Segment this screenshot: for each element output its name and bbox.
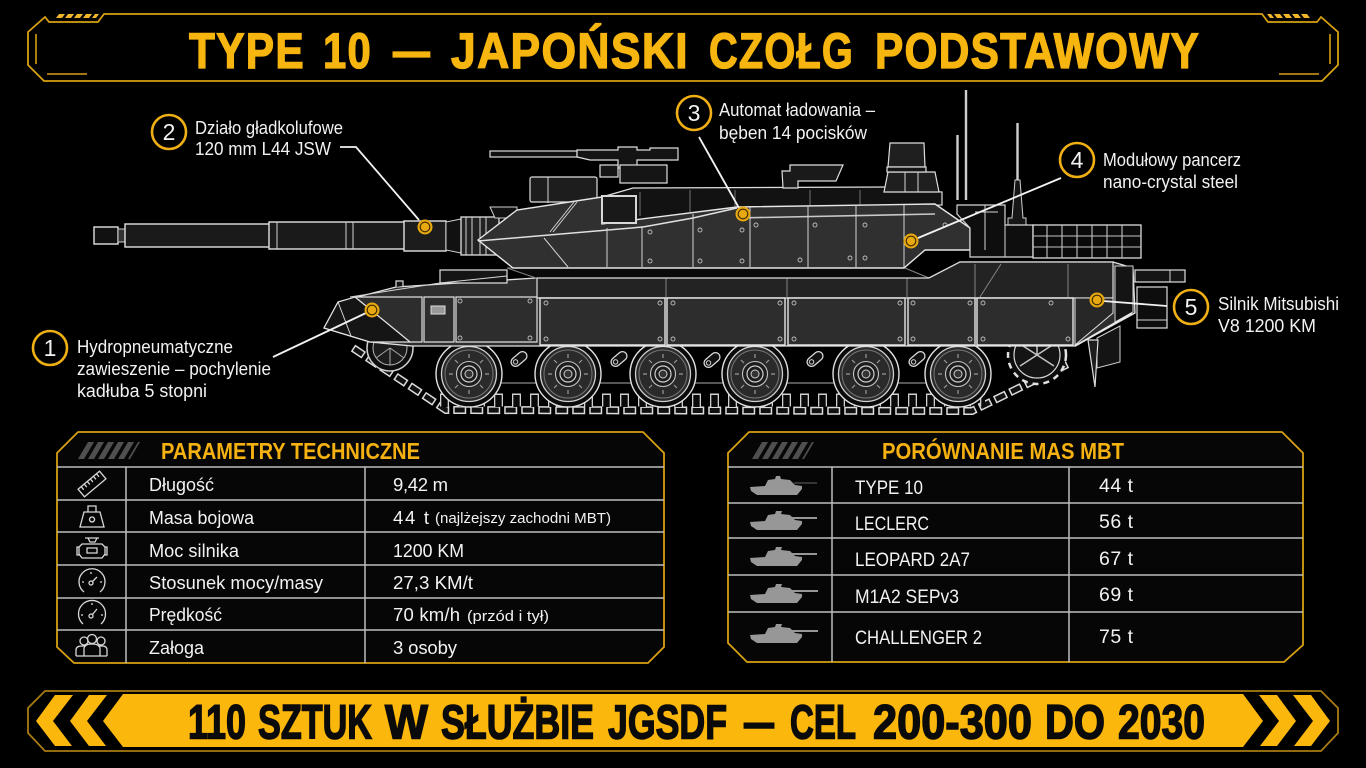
row labels: Załoga xyxy=(149,637,205,658)
callout 1 text: Hydropneumatyczne xyxy=(77,336,233,357)
callout 4 text: Modułowy pancerz xyxy=(1103,149,1241,170)
turret window xyxy=(602,196,636,223)
icon: ruler xyxy=(78,471,106,497)
panel frame xyxy=(728,432,1303,662)
callout 4 text: nano-crystal steel xyxy=(1103,171,1238,192)
banner text: CEL xyxy=(790,696,856,750)
banner text: W xyxy=(385,696,429,750)
panel: MBT mass comparison xyxy=(728,432,1303,662)
callout 2 text: Działo gładkolufowe xyxy=(195,117,343,138)
tank masses xyxy=(1099,475,1134,648)
panel heading: PARAMETRY TECHNICZNE xyxy=(161,438,420,464)
callout 1 number: 1 xyxy=(44,335,56,361)
callout 5 xyxy=(1090,290,1339,336)
side skirt panels xyxy=(540,298,1073,345)
tank masses: 56 t xyxy=(1099,511,1134,533)
callout 1 text: zawieszenie – pochylenie xyxy=(77,358,271,379)
tank silhouette: Leclerc xyxy=(750,511,817,530)
row values: 1200 KM xyxy=(393,540,464,561)
footer banner xyxy=(28,691,1338,751)
callout 2 xyxy=(152,115,432,234)
table grid xyxy=(728,467,1303,662)
row values: (najlżejszy zachodni MBT) xyxy=(435,510,611,527)
title: JAPOŃSKI xyxy=(451,23,689,79)
panel: technical parameters xyxy=(57,432,664,663)
callout 4 leader xyxy=(904,178,1061,248)
table grid xyxy=(57,467,664,663)
callout 5 number xyxy=(1174,290,1208,324)
title: TYPE xyxy=(189,23,305,79)
banner text: 2030 xyxy=(1118,696,1205,750)
tank silhouette: Leopard 2A7 xyxy=(750,547,817,566)
callout 2 number xyxy=(152,115,186,149)
chevrons right xyxy=(1259,695,1330,746)
title: 10 xyxy=(323,23,372,79)
callout 3 number xyxy=(677,96,711,130)
callout 1 leader xyxy=(273,302,380,357)
icon: gauge 2 xyxy=(78,600,106,624)
rear sprocket xyxy=(1008,326,1066,384)
row labels: Masa bojowa xyxy=(149,507,255,528)
icon: engine xyxy=(77,538,107,558)
suspension arms xyxy=(470,382,960,384)
callout 5 text: V8 1200 KM xyxy=(1218,315,1316,336)
callout 5 number: 5 xyxy=(1185,294,1197,320)
shock absorbers xyxy=(509,350,927,369)
callout 5 text xyxy=(1218,293,1339,336)
tank names: M1A2 SEPv3 xyxy=(855,586,959,608)
banner text: SŁUŻBIE xyxy=(441,696,594,750)
front sensor box xyxy=(530,177,597,202)
callout 5 text: Silnik Mitsubishi xyxy=(1218,293,1339,314)
chevrons left xyxy=(36,695,107,746)
title: PODSTAWOWY xyxy=(875,23,1200,79)
rear sight xyxy=(782,165,843,188)
callout 4 text xyxy=(1103,149,1241,192)
callout 4 number xyxy=(1060,143,1094,177)
tank masses: 75 t xyxy=(1099,626,1134,648)
tank names: LEOPARD 2A7 xyxy=(855,549,970,571)
tank masses: 67 t xyxy=(1099,548,1134,570)
banner text: DO xyxy=(1045,696,1105,750)
turret body xyxy=(478,196,970,268)
rivets xyxy=(458,299,1070,341)
front idler wheel xyxy=(367,325,413,371)
title xyxy=(189,23,1200,79)
row values: (przód i tył) xyxy=(467,608,549,625)
upper hull band xyxy=(537,262,1113,298)
road wheels xyxy=(436,341,991,407)
banner text: — xyxy=(744,696,774,750)
banner fill xyxy=(103,694,1263,747)
row labels: Prędkość xyxy=(149,604,222,625)
cupola xyxy=(884,172,939,192)
tank masses: 69 t xyxy=(1099,584,1134,606)
callout 5 leader xyxy=(1090,292,1167,308)
header stripes xyxy=(752,442,814,459)
title banner xyxy=(28,14,1338,81)
turret top equipment xyxy=(490,90,1026,226)
machine gun xyxy=(490,151,577,157)
roof xyxy=(602,187,942,226)
icon: weight xyxy=(80,506,104,527)
icon: gauge 1 xyxy=(79,569,105,592)
callout 2 text xyxy=(195,117,343,159)
callout 2 leader xyxy=(340,147,432,234)
row labels: Moc silnika xyxy=(149,540,240,561)
gap band under turret xyxy=(507,268,929,278)
callout 3 text: Automat ładowania – xyxy=(719,99,876,120)
header stripes xyxy=(78,442,140,459)
callout 3 text: bęben 14 pocisków xyxy=(719,122,868,143)
tank masses: 44 t xyxy=(1099,475,1134,497)
frame accents xyxy=(36,34,1330,74)
rear stowage xyxy=(1135,270,1185,328)
tank names xyxy=(855,477,982,649)
tank silhouette: Type 10 xyxy=(750,476,817,495)
rivets xyxy=(648,223,947,263)
rear hull section xyxy=(1075,298,1113,345)
antennas xyxy=(958,90,1018,218)
callout 3 number: 3 xyxy=(688,100,700,126)
callout 2 number: 2 xyxy=(163,119,175,145)
row labels: Stosunek mocy/masy xyxy=(149,572,324,593)
banner text: JGSDF xyxy=(608,696,727,750)
banner frame xyxy=(28,691,1338,751)
row labels xyxy=(149,474,324,658)
callout 1 number xyxy=(33,331,67,365)
front hull panels xyxy=(355,297,537,342)
callout 3 text xyxy=(719,99,876,143)
callout 1 xyxy=(33,302,380,401)
callout 4 xyxy=(904,143,1241,248)
banner text: SZTUK xyxy=(258,696,372,750)
tank names: CHALLENGER 2 xyxy=(855,627,982,649)
track xyxy=(353,348,1070,411)
icon: crew xyxy=(76,634,107,656)
tank silhouette: M1A2 xyxy=(750,584,818,603)
rear lower armour xyxy=(1097,326,1120,368)
title: — xyxy=(393,23,431,79)
callout 3 leader xyxy=(699,137,750,222)
callout 3 xyxy=(677,96,876,222)
tank names: LECLERC xyxy=(855,513,929,535)
title frame xyxy=(28,14,1338,81)
gun barrel xyxy=(94,217,499,255)
hull xyxy=(324,262,1135,346)
panel heading: PORÓWNANIE MAS MBT xyxy=(882,437,1125,464)
row values: 44 t xyxy=(393,507,429,528)
row values: 3 osoby xyxy=(393,637,458,658)
tank illustration xyxy=(94,90,1185,411)
banner text xyxy=(188,696,1205,750)
rear turret frame and basket xyxy=(957,205,1141,258)
row values: 70 km/h xyxy=(393,604,460,625)
banner text: 110 xyxy=(188,696,246,750)
tank silhouette: Challenger 2 xyxy=(750,624,818,643)
callout 1 text xyxy=(77,336,271,401)
row values: 27,3 KM/t xyxy=(393,572,473,593)
front box xyxy=(440,270,507,283)
callout 1 text: kadłuba 5 stopni xyxy=(77,380,207,401)
rear spike xyxy=(1088,340,1098,387)
panel frame xyxy=(57,432,664,663)
tank names: TYPE 10 xyxy=(855,477,923,499)
row values xyxy=(393,474,611,658)
title: CZOŁG xyxy=(709,23,854,79)
hazard stripes xyxy=(56,14,1310,18)
banner text: 200-300 xyxy=(873,696,1032,750)
callout 4 number: 4 xyxy=(1071,147,1084,173)
row labels: Długość xyxy=(149,474,214,495)
row values: 9,42 m xyxy=(393,474,448,495)
callout 2 text: 120 mm L44 JSW xyxy=(195,138,331,159)
